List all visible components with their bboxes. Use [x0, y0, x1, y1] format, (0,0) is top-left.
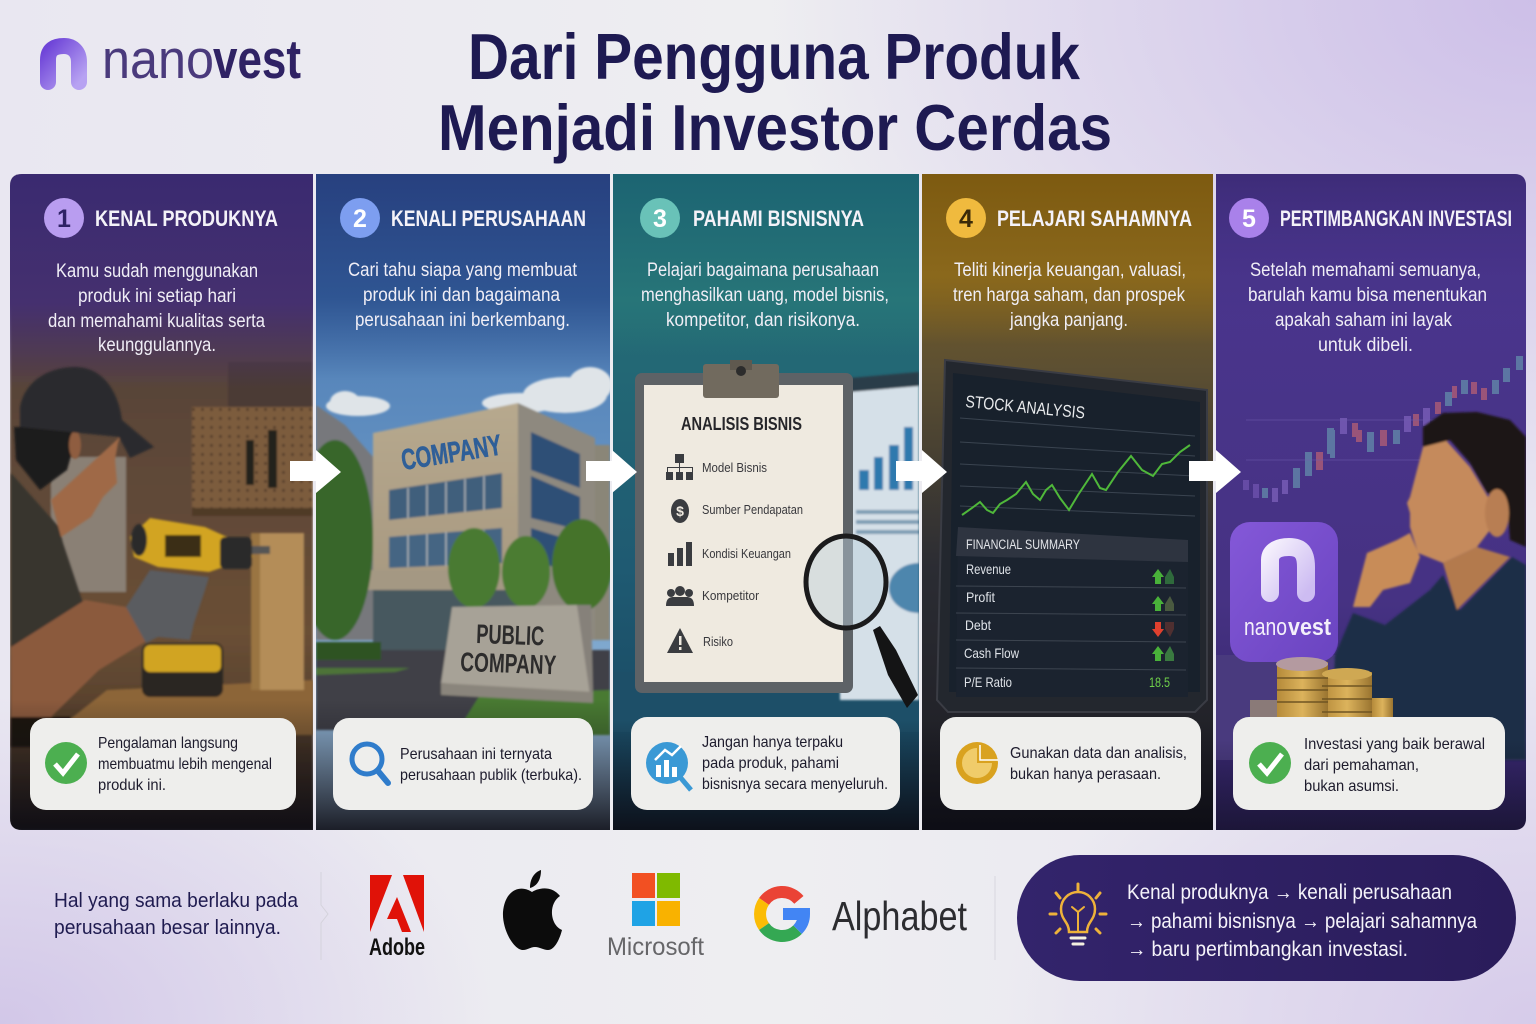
- description: [348, 260, 578, 331]
- description: perusahaan ini berkembang.: [355, 310, 570, 331]
- callout 2: [333, 718, 593, 810]
- hand: [1353, 533, 1420, 607]
- item: risiko: Risiko: [703, 634, 733, 649]
- trees: [316, 439, 374, 642]
- arrow 4: [1189, 450, 1241, 493]
- logo: google alphabet: [760, 892, 968, 939]
- description: Setelah memahami semuanya,: [1250, 260, 1481, 281]
- row: p/e ratio: [964, 674, 1170, 690]
- bottom text: Hal yang sama berlaku pada: [54, 890, 299, 912]
- row: revenue: Revenue: [966, 561, 1011, 577]
- icon: pie chart: [956, 742, 998, 784]
- row: p/e ratio: P/E Ratio: [964, 674, 1012, 690]
- candlestick chart: [1243, 356, 1523, 502]
- scene: worker with drill: [11, 367, 313, 747]
- callout text: bisnisnya secara menyeluruh.: [702, 776, 888, 793]
- step badge 5: [1229, 198, 1269, 238]
- header tint: [922, 174, 1213, 344]
- header tint: [613, 174, 919, 306]
- callout text: membuatmu lebih mengenal: [98, 756, 272, 773]
- callout 3: [631, 717, 900, 810]
- heading: PELAJARI SAHAMNYA: [997, 206, 1192, 231]
- title: [438, 20, 1112, 164]
- callout text: [702, 734, 888, 793]
- row: profit: [966, 589, 1174, 611]
- callout 5: [1233, 717, 1505, 810]
- row: debt: Debt: [965, 617, 991, 633]
- app name: vest: [1288, 614, 1331, 641]
- building sign text: COMPANY: [399, 430, 504, 477]
- header tint: [1216, 174, 1526, 354]
- hair: [1423, 412, 1526, 547]
- icon: magnifier: [352, 744, 388, 783]
- stock monitor: [937, 360, 1207, 712]
- line chart: [962, 445, 1190, 515]
- callout text: Jangan hanya terpaku: [702, 734, 843, 751]
- stone sign text: PUBLIC: [476, 619, 545, 651]
- magnifying glass: [806, 536, 918, 708]
- sign stone: [441, 605, 591, 697]
- app name: nano: [1244, 614, 1287, 641]
- item: kompetitor: [666, 586, 760, 606]
- callout text: bukan asumsi.: [1304, 778, 1399, 795]
- description: menghasilkan uang, model bisnis,: [641, 285, 889, 306]
- bottom fade: [1216, 740, 1526, 830]
- row: revenue: [966, 561, 1174, 584]
- bottom text: perusahaan besar lainnya.: [54, 917, 281, 939]
- item: sumber pendapatan: [671, 499, 803, 523]
- callout text: bukan hanya perasaan.: [1010, 766, 1161, 783]
- callout 1: [30, 718, 296, 810]
- callout 4: [940, 717, 1201, 810]
- step badge 1: 1: [57, 205, 71, 233]
- logo: google alphabet: Alphabet: [832, 893, 968, 939]
- building: [518, 403, 595, 640]
- callout text: Perusahaan ini ternyata: [400, 746, 552, 763]
- summary pill: [1017, 855, 1516, 981]
- icon: nanovest n: [48, 46, 79, 82]
- sky: [316, 301, 610, 828]
- icon: analytics magnifier: [646, 742, 691, 790]
- description: keunggulannya.: [98, 335, 216, 356]
- callout text: Gunakan data dan analisis,: [1010, 745, 1187, 762]
- title: Menjadi Investor Cerdas: [438, 91, 1112, 164]
- sweater: [1330, 557, 1526, 760]
- description: Cari tahu siapa yang membuat: [348, 260, 578, 281]
- description: [1248, 260, 1487, 356]
- icon: check: [45, 742, 87, 784]
- heading: KENAL PRODUKNYA: [95, 206, 278, 231]
- wordmark: vest: [213, 28, 301, 90]
- scene: company building: [297, 367, 612, 735]
- step badge 2: [340, 198, 380, 238]
- bottom fade: [316, 700, 610, 830]
- logo: microsoft: Microsoft: [607, 933, 704, 961]
- callout text: Investasi yang baik berawal: [1304, 736, 1485, 753]
- description: produk ini dan bagaimana: [363, 285, 560, 306]
- bottom text: [54, 890, 299, 939]
- icon: check: [1249, 742, 1291, 784]
- logo: adobe: [369, 875, 425, 961]
- arrow 2: [586, 450, 637, 493]
- row: cash flow: Cash Flow: [964, 645, 1020, 661]
- panel 4: pelajari sahamnya: [922, 174, 1213, 830]
- step badge 4: [946, 198, 986, 238]
- description: jangka panjang.: [1009, 310, 1128, 331]
- step badge 3: [640, 198, 680, 238]
- logo: nanovest: [48, 28, 301, 90]
- app icon: [1230, 522, 1338, 662]
- financial summary table: FINANCIAL SUMMARY: [966, 537, 1080, 552]
- description: Pelajari bagaimana perusahaan: [647, 260, 879, 281]
- step badge 4: 4: [959, 205, 973, 233]
- item: sumber pendapatan: $: [676, 503, 684, 519]
- item: sumber pendapatan: Sumber Pendapatan: [702, 502, 803, 517]
- panel 3: pahami bisnisnya: [613, 174, 919, 830]
- logo: adobe: Adobe: [369, 934, 425, 961]
- item: kondisi keuangan: Kondisi Keuangan: [702, 546, 791, 561]
- header tint: [10, 174, 313, 389]
- bottom fade: [613, 720, 919, 830]
- glove: [126, 570, 209, 643]
- logo: apple: [503, 870, 562, 950]
- bottom fade: [10, 700, 313, 830]
- background report: [840, 372, 919, 700]
- item: risiko: [667, 628, 733, 653]
- description: Teliti kinerja keuangan, valuasi,: [954, 260, 1186, 281]
- description: dan memahami kualitas serta: [48, 311, 265, 332]
- heading: PAHAMI BISNISNYA: [693, 206, 864, 231]
- clip: [703, 360, 779, 398]
- row: debt: [965, 617, 1174, 637]
- arrow 1: [290, 450, 341, 493]
- description: apakah saham ini layak: [1275, 310, 1452, 331]
- stone sign text: [461, 624, 556, 674]
- item: kondisi keuangan: [668, 542, 791, 566]
- row: profit: Profit: [966, 589, 995, 605]
- financial summary table: [956, 527, 1188, 697]
- item: model bisnis: [666, 454, 767, 480]
- callout text: produk ini.: [98, 777, 166, 794]
- drill: [130, 518, 253, 572]
- neck: [1443, 547, 1510, 610]
- wordmark: [102, 28, 301, 90]
- summary text: → pahami bisnisnya → pelajari sahamnya: [1127, 910, 1477, 933]
- scene background: [613, 302, 919, 830]
- description: tren harga saham, dan prospek: [953, 285, 1185, 306]
- panel 2: kenali perusahaan: [297, 174, 612, 830]
- step badge 5: 5: [1242, 205, 1256, 233]
- title: Dari Pengguna Produk: [468, 20, 1081, 93]
- arrow 3: [896, 450, 947, 493]
- thinking man: [1330, 412, 1526, 760]
- description: produk ini setiap hari: [78, 286, 236, 307]
- wordmark: nano: [102, 28, 214, 90]
- step badge 1: [44, 198, 84, 238]
- description: Kamu sudah menggunakan: [56, 261, 258, 282]
- item: model bisnis: Model Bisnis: [702, 460, 767, 475]
- summary text: Kenal produknya → kenali perusahaan: [1127, 881, 1452, 904]
- worker body: [11, 473, 83, 650]
- row: p/e ratio: 18.5: [1149, 674, 1170, 690]
- description: [48, 261, 265, 356]
- coin stacks: [1250, 657, 1393, 725]
- callout text: Pengalaman langsung: [98, 735, 238, 752]
- scene background: [1216, 174, 1526, 830]
- grid lines: [960, 418, 1195, 516]
- callout text: pada produk, pahami: [702, 755, 839, 772]
- icon: light bulb: [1050, 884, 1106, 944]
- logo: microsoft: [607, 873, 704, 961]
- scene background: [922, 174, 1213, 830]
- description: kompetitor, dan risikonya.: [666, 310, 860, 331]
- stone sign text: COMPANY: [460, 647, 557, 680]
- summary text: → baru pertimbangkan investasi.: [1127, 938, 1408, 961]
- description: untuk dibeli.: [1318, 335, 1413, 356]
- callout text: dari pemahaman,: [1304, 757, 1419, 774]
- ground: [316, 650, 610, 730]
- face: [1407, 437, 1500, 563]
- step badge 2: 2: [353, 205, 367, 233]
- row: cash flow: [964, 645, 1174, 661]
- description: barulah kamu bisa menentukan: [1248, 285, 1487, 306]
- scene backdrop: [10, 174, 313, 830]
- item: kompetitor: Kompetitor: [702, 588, 760, 603]
- clipboard title: ANALISIS BISNIS: [681, 413, 802, 434]
- clipboard: [635, 360, 853, 693]
- app name: [1244, 614, 1331, 641]
- summary text: [1127, 881, 1477, 961]
- monitor title: STOCK ANALYSIS: [965, 392, 1086, 422]
- panel 5: pertimbangkan investasi: [1216, 174, 1526, 830]
- callout text: [1010, 745, 1187, 783]
- panel 1: kenal produknya: [10, 174, 313, 830]
- description: [641, 260, 889, 331]
- heading: KENALI PERUSAHAAN: [391, 206, 586, 231]
- callout text: [400, 746, 582, 784]
- description: [953, 260, 1186, 331]
- callout text: [1304, 736, 1485, 795]
- bottom fade: [922, 720, 1213, 830]
- header tint: [316, 174, 610, 379]
- step badge 3: 3: [653, 205, 667, 233]
- callout text: [98, 735, 272, 794]
- callout text: perusahaan publik (terbuka).: [400, 767, 582, 784]
